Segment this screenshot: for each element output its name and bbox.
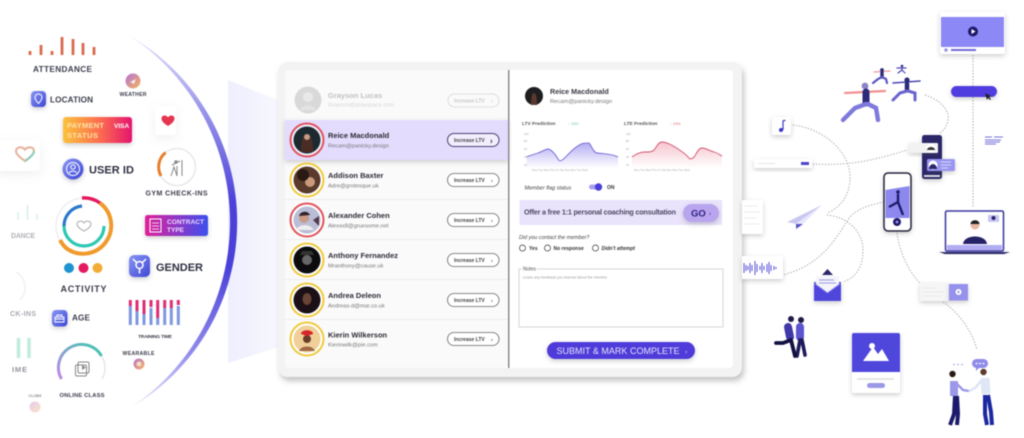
notes box: Notes <box>523 266 537 272</box>
LTV prediction chart: 80 <box>524 139 528 143</box>
dotted connectors <box>783 55 977 350</box>
handshake illustration <box>949 359 992 425</box>
row: Grayson Lucas: Grayson@grayspace.com <box>328 102 394 108</box>
audio waveform card <box>742 256 783 279</box>
online class metric <box>58 344 105 399</box>
row: Anthony Fernandez <box>290 244 499 276</box>
payment status card: PAYMENT <box>67 121 104 130</box>
faded attendance <box>11 205 37 240</box>
image card <box>852 333 900 393</box>
member list <box>285 70 508 368</box>
LTV prediction chart: Mon Tue Wed Thu Fri Sat Sun Mon Tue Wed <box>532 168 588 172</box>
contact question: Yes <box>529 246 538 252</box>
gym check-ins metric: GYM CHECK-INS <box>146 190 208 198</box>
row: Alexander Cohen: Alexxx8@gruesome.net <box>328 224 389 230</box>
offer banner: › <box>709 212 711 218</box>
offer banner <box>520 200 722 225</box>
LTE prediction chart: Mon Tue Wed Thu Fri Sat Sun Mon Tue Wed <box>634 168 690 172</box>
row: Anthony Fernandez: › <box>491 258 493 264</box>
tablet frame <box>278 62 742 377</box>
tiny yoga figure <box>897 65 906 73</box>
payment status card: VISA <box>114 123 129 130</box>
age metric: AGE <box>72 314 91 322</box>
member header: Reice Macdonald <box>550 87 609 96</box>
gender metric <box>129 255 203 277</box>
paper plane <box>787 205 822 229</box>
row: Anthony Fernandez: Anthony Fernandez <box>328 251 398 260</box>
row: Kierin Wilkerson: Kierinwilk@pie.com <box>328 342 378 348</box>
contract type card <box>145 215 208 236</box>
LTV prediction chart: 60 <box>524 147 528 151</box>
wellness heart card <box>0 140 40 171</box>
row: Addison Baxter: › <box>491 178 493 184</box>
laptop video call <box>939 211 1010 254</box>
LTV prediction chart: 20 <box>524 163 528 167</box>
blue pill button with cursor <box>951 86 997 100</box>
member flag toggle: Member flag status <box>524 186 572 192</box>
location metric: LOCATION <box>50 96 93 104</box>
contact question: Didn't attempt <box>602 246 635 252</box>
LTE prediction chart: LTE Prediction <box>624 121 658 127</box>
background wedge <box>228 80 285 363</box>
user id metric <box>62 158 134 180</box>
speech bubble <box>972 359 988 371</box>
gender metric: GENDER <box>156 262 203 274</box>
contact question: Did you contact the member? <box>519 235 589 241</box>
gym check-ins metric <box>146 148 208 198</box>
wearable metric <box>122 351 155 370</box>
training time chart: TRAINING TIME <box>138 334 173 340</box>
search bar card <box>754 159 812 168</box>
row: Reice Macdonald (selected): Recam@panicky.design <box>328 144 389 150</box>
row: Alexander Cohen: Alexander Cohen <box>328 211 390 220</box>
row: Grayson Lucas: Increase LTV <box>454 98 485 104</box>
row: Grayson Lucas: › <box>491 98 493 104</box>
online class metric: ONLINE CLASS <box>60 393 105 399</box>
row: Andrea Deleon: Andrea Deleon <box>328 291 381 300</box>
row: Andrea Deleon: › <box>491 298 493 304</box>
user id metric: USER ID <box>89 164 134 176</box>
person right <box>969 369 992 425</box>
member header <box>525 87 612 105</box>
row: Addison Baxter: Adre@grotesque.uk <box>328 184 379 190</box>
row: Kierin Wilkerson: › <box>491 338 493 344</box>
weather metric: WEATHER <box>120 92 147 98</box>
LTE prediction chart: 80 <box>626 139 630 143</box>
faded clubs: CLUBS <box>28 394 42 398</box>
attendance metric <box>30 37 94 74</box>
central tablet <box>278 62 742 377</box>
envelope icon <box>814 269 841 301</box>
LTE prediction chart: ↓ 24% <box>670 122 681 126</box>
person left <box>949 371 969 425</box>
contract type card: TYPE <box>167 227 185 234</box>
row: Grayson Lucas: Grayson Lucas <box>328 91 382 100</box>
LTV prediction chart: 40 <box>524 155 528 159</box>
member flag toggle <box>524 183 615 192</box>
notes box: Leave any feedback you learned about the member <box>523 276 608 280</box>
LTE prediction chart: 100 <box>626 132 631 136</box>
faded attendance: DANCE <box>11 233 35 240</box>
row: Kierin Wilkerson <box>290 322 499 356</box>
medium yoga figure <box>893 77 920 100</box>
payment status card: STATUS <box>67 131 98 140</box>
LTV prediction chart: LTV Prediction <box>522 121 556 127</box>
activity rings <box>56 198 112 254</box>
attendance label: ATTENDANCE <box>33 65 93 74</box>
activity label: ACTIVITY <box>60 284 106 294</box>
wearable metric: WEARABLE <box>122 351 155 357</box>
music note card <box>772 117 791 135</box>
submit button <box>547 342 695 359</box>
typing dots <box>953 364 963 366</box>
row: Reice Macdonald (selected): Increase LTV <box>454 138 485 144</box>
row: Andrea Deleon: Andreas-d@mar.co.uk <box>328 304 385 310</box>
panel divider <box>508 70 510 368</box>
weather metric <box>120 74 147 98</box>
row: Grayson Lucas <box>294 86 499 114</box>
video card <box>940 12 1005 54</box>
offscreen note card <box>742 200 763 234</box>
LTE prediction chart: 40 <box>626 155 630 159</box>
chat bubble <box>927 159 955 171</box>
offer banner: Offer a free 1:1 personal coaching consultation <box>524 208 676 216</box>
chat phone <box>909 135 955 179</box>
member flag toggle: ON <box>607 185 615 191</box>
faded training time <box>12 338 29 374</box>
crescent arc <box>130 36 237 408</box>
yoga figures <box>843 65 920 120</box>
payment status card <box>63 117 132 143</box>
LTV prediction chart <box>522 121 618 172</box>
row: Reice Macdonald (selected) <box>285 120 508 160</box>
caption lines <box>985 137 1003 144</box>
row: Andrea Deleon: Increase LTV <box>454 298 485 304</box>
row: Alexander Cohen <box>290 204 499 236</box>
row: Andrea Deleon <box>290 284 499 316</box>
tablet screen <box>285 70 733 368</box>
row: Anthony Fernandez: Mranthony@cause.uk <box>328 264 384 270</box>
row: Addison Baxter: Increase LTV <box>454 178 485 184</box>
row: Alexander Cohen: Increase LTV <box>454 218 485 224</box>
fitness phone <box>884 173 911 231</box>
LTE prediction chart: 20 <box>626 163 630 167</box>
training time chart <box>130 300 178 340</box>
age metric <box>52 310 91 326</box>
LTV prediction chart: ↑ 24% <box>568 122 579 126</box>
row: Reice Macdonald (selected): › <box>490 136 493 146</box>
list background <box>285 70 508 368</box>
row: Anthony Fernandez: Increase LTV <box>454 258 485 264</box>
large yoga figure <box>843 83 885 120</box>
faded check-ins <box>10 272 36 318</box>
row: Addison Baxter: Addison Baxter <box>328 171 384 180</box>
faded clubs <box>28 394 42 412</box>
row: Kierin Wilkerson: Kierin Wilkerson <box>328 330 388 340</box>
submit button: SUBMIT & MARK COMPLETE <box>556 346 680 356</box>
notes box <box>519 266 723 327</box>
attendance bars <box>30 37 94 55</box>
faded training time: IME <box>12 365 27 374</box>
LTE prediction chart <box>624 121 722 172</box>
row: Addison Baxter <box>290 164 499 196</box>
small play card <box>920 283 968 301</box>
row: Alexander Cohen: › <box>491 218 493 224</box>
small yoga figure <box>873 68 890 83</box>
location metric <box>31 91 93 107</box>
offer banner: GO <box>691 208 706 220</box>
heart card <box>155 106 176 135</box>
activity dots <box>64 263 102 273</box>
faded check-ins: CK-INS <box>10 311 36 318</box>
submit button: › <box>685 349 688 356</box>
contact card <box>909 143 938 153</box>
contact question <box>519 235 635 252</box>
LTE prediction chart: 60 <box>626 147 630 151</box>
member header: Recam@panicky.design <box>550 99 612 105</box>
row: Reice Macdonald (selected): Reice Macdonald <box>328 131 390 140</box>
row: Kierin Wilkerson: Increase LTV <box>454 337 485 343</box>
runners illustration <box>776 316 805 356</box>
LTV prediction chart: 100 <box>524 132 529 136</box>
contract type card: CONTRACT <box>167 219 204 226</box>
contact question: No response <box>554 246 584 252</box>
